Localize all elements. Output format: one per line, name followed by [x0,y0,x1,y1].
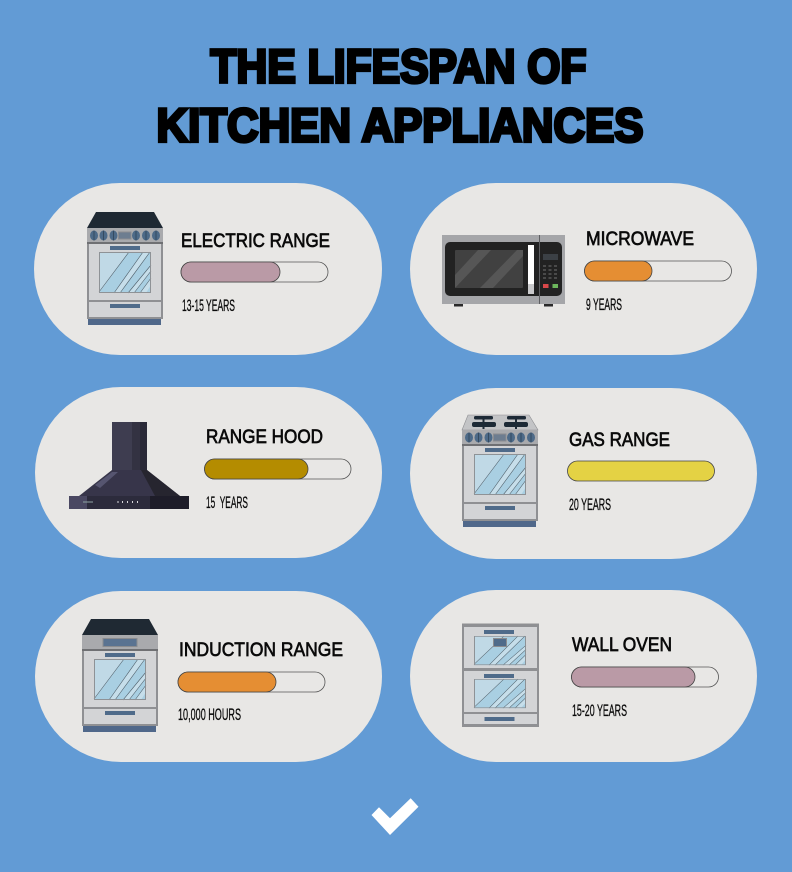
lifespan: gas range: 20 YEARS [569,496,611,514]
heading: electric range: ELECTRIC RANGE [181,230,330,252]
progress bar: induction range [178,672,325,692]
panel: microwave [410,183,757,355]
heading: gas range: GAS RANGE [569,429,670,451]
title [156,40,644,152]
panel: induction range [35,591,382,762]
icon: wall oven [462,624,539,727]
icon: check mark [372,798,418,835]
heading: microwave: MICROWAVE [586,228,694,250]
progress bar: gas range [568,461,714,481]
lifespan: range hood: 15 YEARS [206,494,248,512]
icon: electric range [87,212,163,325]
lifespan: induction range: 10,000 HOURS [178,706,241,724]
lifespan: wall oven: 15-20 YEARS [572,702,627,720]
icon: gas range [462,415,538,527]
icon: induction range [82,619,158,732]
progress bar: wall oven [572,667,718,687]
title: THE LIFESPAN OF [210,40,586,92]
progress bar: range hood [204,459,351,479]
heading: induction range: INDUCTION RANGE [179,639,343,661]
heading: wall oven: WALL OVEN [572,634,672,656]
panel: wall oven [410,590,757,762]
panel: range hood [35,387,382,558]
panel: gas range [410,388,757,559]
progress bar: electric range [181,262,328,282]
title: KITCHEN APPLIANCES [156,98,644,152]
lifespan: microwave: 9 YEARS [586,296,622,314]
icon: range hood [69,422,189,509]
lifespan: electric range: 13-15 YEARS [182,297,235,315]
progress bar: microwave [584,261,732,281]
icon: microwave [442,235,565,306]
panel: electric range [34,183,382,355]
heading: range hood: RANGE HOOD [206,426,323,448]
